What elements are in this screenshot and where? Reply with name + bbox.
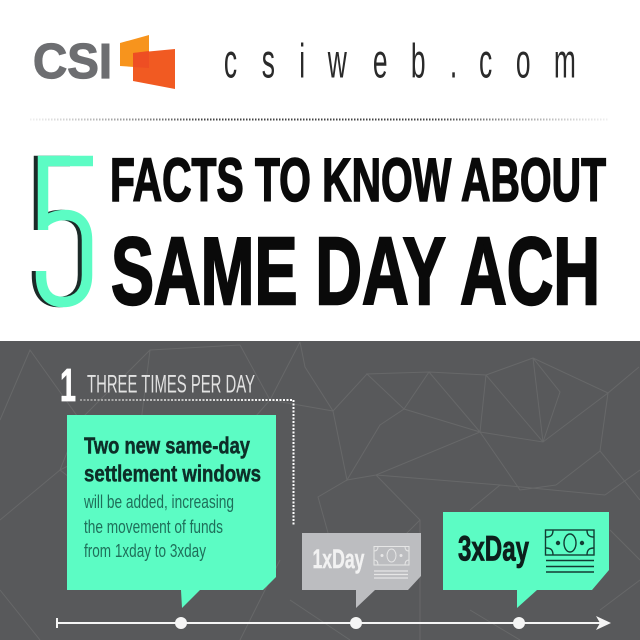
icon: banknote dark: [546, 530, 594, 572]
icon: banknote light: [374, 546, 409, 578]
fact heading: THREE TIMES PER DAY: [87, 371, 255, 399]
callout heading line 2: settlement windows: [84, 460, 261, 486]
dotted divider: [30, 118, 608, 120]
dark panel: fact 1: [0, 341, 640, 640]
1xDay label: 1xDay: [312, 544, 364, 574]
website address: csiweb.com: [224, 35, 576, 89]
callout body line 1: will be added, increasing: [83, 491, 234, 512]
timeline marker 1: [175, 617, 187, 629]
callout: 3xDay: [443, 512, 609, 608]
3xDay label: 3xDay: [458, 530, 529, 568]
callout: 1xDay: [302, 533, 421, 608]
numeral 5: [37, 161, 93, 302]
callout body line 3: from 1xday to 3xday: [84, 540, 207, 561]
callout body line 2: the movement of funds: [84, 516, 223, 537]
callout: two new windows: [67, 415, 276, 608]
logo: CSI: CSI: [33, 35, 112, 89]
logo: CSI: [33, 35, 175, 89]
timeline marker 2: [350, 617, 362, 629]
fact number: 1: [60, 359, 76, 411]
dotted connector: [80, 400, 294, 525]
callout heading line 1: Two new same-day: [84, 432, 250, 458]
timeline arrow: [57, 616, 611, 630]
timeline marker 3: [513, 617, 525, 629]
